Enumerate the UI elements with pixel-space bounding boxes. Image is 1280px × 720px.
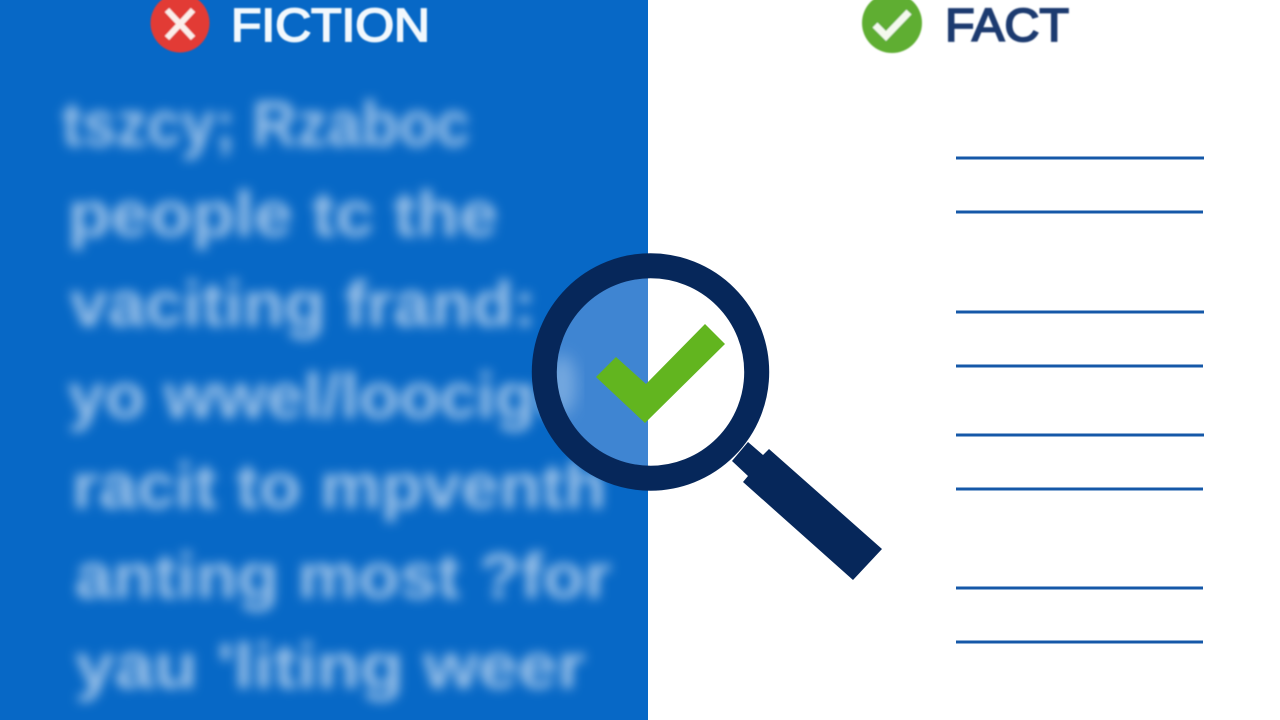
icon: red cross: [150, 0, 210, 52]
blurred fiction text block: yau 'liting weer: [75, 630, 585, 702]
fiction header: [150, 0, 430, 52]
blurred fiction text block: yo wwel/loocigo: [68, 360, 576, 432]
check mark: [596, 324, 725, 423]
blurred fiction text block: tszcy; Rzaboc: [62, 88, 470, 160]
panel: fact background: [648, 0, 1280, 720]
icon: green check: [862, 0, 922, 53]
heading: fiction: FICTION: [231, 0, 430, 51]
fact lines: [956, 158, 1204, 642]
blurred fiction text block: anting most ?for: [75, 540, 611, 612]
icon: magnifying glass: [544, 266, 882, 580]
fact header: [862, 0, 1069, 53]
lens ring: [544, 266, 757, 478]
blurred fiction text block: people tc the: [68, 178, 498, 250]
blurred fiction text block: racit to mpventh: [72, 450, 606, 522]
heading: fact: FACT: [945, 0, 1069, 51]
handle: [732, 442, 882, 580]
blurred fiction text block: [62, 88, 611, 702]
blurred fiction text block: vaciting frand:: [70, 268, 536, 340]
lens interior: [556, 278, 648, 466]
panel: fiction background: [0, 0, 648, 720]
